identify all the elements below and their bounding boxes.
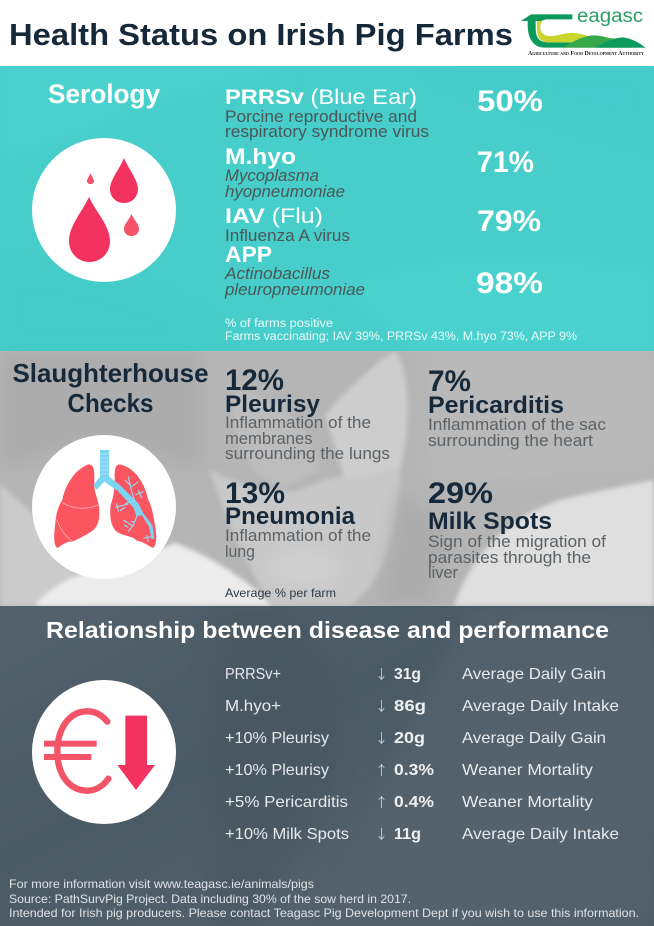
stat: APP 98%: 98% (476, 267, 543, 300)
panel: serology (0, 66, 654, 351)
heading: Slaughterhouse Checks: Checks (68, 388, 154, 418)
stat: Pneumonia: 13% (225, 477, 285, 510)
heading: Slaughterhouse Checks: Slaughterhouse (12, 358, 208, 388)
row: Pleurisy gain: +10% Pleurisy (225, 730, 329, 747)
row: PRRSv: Average Daily Gain (462, 666, 606, 683)
item: IAV: IAV (Flu) (225, 204, 323, 228)
item: M.hyo (225, 144, 345, 201)
stat: Pleurisy: 12% (225, 364, 284, 397)
item: APP: APP (225, 242, 272, 267)
row: Pleurisy gain: 20g (394, 730, 425, 747)
stat: Pneumonia: lung (225, 543, 255, 561)
row: Milk Spots: 11g (394, 826, 421, 843)
logo: Teagasc: Agriculture and Food Development Authority (528, 51, 644, 57)
heading: relationship: Relationship between disease and performance (46, 617, 609, 643)
panel: disease and performance (0, 606, 654, 926)
row: Pleurisy gain (226, 732, 605, 746)
item: APP: pleuropneumoniae (224, 281, 365, 299)
row: Pleurisy mortality: Weaner Mortality (462, 762, 593, 779)
note: farms positive and vaccinating (225, 318, 577, 343)
stat: Pericarditis: surrounding the heart (428, 432, 593, 450)
logo: Teagasc (521, 6, 646, 57)
item: PRRSv: respiratory syndrome virus (225, 123, 429, 141)
stat: Milk Spots: Sign of the migration of (428, 533, 606, 551)
icon: lungs (32, 435, 176, 579)
title: Health Status on Irish Pig Farms (9, 17, 513, 52)
note: average per farm: Average % per farm (225, 586, 336, 600)
item: IAV (226, 208, 350, 241)
row: PRRSv (226, 668, 605, 682)
row: M.hyo: ↓ (375, 696, 388, 715)
footer text: Source: PathSurvPig Project. Data including 30% of the sow herd in 2017. (9, 892, 411, 906)
stat: IAV 79%: 79% (477, 205, 541, 238)
stat: Pneumonia: Inflammation of the (225, 527, 371, 545)
icon: euro falling (32, 680, 176, 824)
stat: Pericarditis (428, 365, 606, 450)
row: Pericarditis (226, 796, 593, 810)
stat: Pneumonia (225, 477, 371, 561)
note: farms positive and vaccinating: % of farms positive (225, 318, 333, 330)
row: Pleurisy mortality: 0.3% (394, 762, 434, 779)
item: M.hyo: M.hyo (225, 144, 296, 169)
footer text (9, 877, 639, 920)
row: Pericarditis: +5% Pericarditis (225, 794, 348, 811)
stat: Pleurisy: membranes (225, 430, 312, 448)
footer text: Intended for Irish pig producers. Please contact Teagasc Pig Development Dept if you wish to use this information. (9, 906, 639, 920)
stat: Milk Spots: parasites through the (428, 549, 591, 567)
stat: M.hyo 71%: 71% (477, 146, 534, 179)
item: M.hyo: hyopneumoniae (225, 183, 345, 201)
stat: Pneumonia: Pneumonia (225, 503, 356, 530)
row: PRRSv: PRRSv+ (225, 666, 281, 683)
item: APP: Actinobacillus (224, 265, 330, 283)
row: Pericarditis: 0.4% (394, 794, 434, 811)
stat: Pericarditis: Inflammation of the sac (428, 416, 606, 434)
row: Milk Spots: +10% Milk Spots (225, 826, 349, 843)
item: PRRSv: Porcine reproductive and (225, 108, 417, 126)
stat: PRRSv 50%: 50% (477, 85, 543, 118)
icon: blood drops (32, 138, 176, 282)
row: M.hyo: 86g (394, 698, 426, 715)
row: Pleurisy gain: ↓ (375, 728, 388, 747)
item: APP (224, 242, 365, 299)
item: PRRSv: PRRSv (Blue Ear) (225, 85, 417, 109)
item: M.hyo: Mycoplasma (225, 167, 319, 185)
logo: Teagasc: eagasc (577, 6, 643, 27)
row: PRRSv: 31g (394, 666, 421, 683)
item: IAV: Influenza A virus (225, 227, 350, 245)
stat: Milk Spots: 29% (428, 477, 493, 510)
stat: Pericarditis: Pericarditis (428, 392, 564, 419)
row: M.hyo: M.hyo+ (225, 698, 281, 715)
header (0, 0, 654, 66)
row: Milk Spots (226, 828, 618, 842)
row: Pericarditis: Weaner Mortality (462, 794, 593, 811)
stat: Milk Spots (428, 477, 606, 582)
note: farms positive and vaccinating: Farms vaccinating; IAV 39%, PRRSv 43%, M.hyo 73%, APP 9% (225, 331, 577, 343)
stat: Milk Spots: liver (428, 564, 458, 582)
panel: slaughterhouse checks (0, 351, 654, 606)
row: Pleurisy gain: Average Daily Gain (462, 730, 606, 747)
row: Pleurisy mortality: ↑ (375, 760, 388, 779)
stat: Milk Spots: Milk Spots (428, 508, 552, 535)
heading: Slaughterhouse Checks (13, 363, 208, 412)
stat: Pleurisy: surrounding the lungs (225, 445, 390, 463)
footer text: For more information visit www.teagasc.ie/animals/pigs (9, 877, 314, 891)
stat: Pleurisy (225, 364, 390, 463)
row: Milk Spots: Average Daily Intake (462, 826, 619, 843)
row: M.hyo: Average Daily Intake (462, 698, 619, 715)
row: Pleurisy mortality (226, 764, 593, 778)
row: Milk Spots: ↓ (375, 824, 388, 843)
item: PRRSv (225, 85, 429, 141)
stat: Pleurisy: Pleurisy (225, 391, 321, 418)
heading: Serology: Serology (48, 79, 160, 109)
stat: Pleurisy: Inflammation of the (225, 414, 371, 432)
row: M.hyo (226, 700, 618, 714)
row: PRRSv: ↓ (375, 664, 388, 683)
row: Pleurisy mortality: +10% Pleurisy (225, 762, 329, 779)
row: Pericarditis: ↑ (375, 792, 388, 811)
stat: Pericarditis: 7% (428, 365, 471, 398)
